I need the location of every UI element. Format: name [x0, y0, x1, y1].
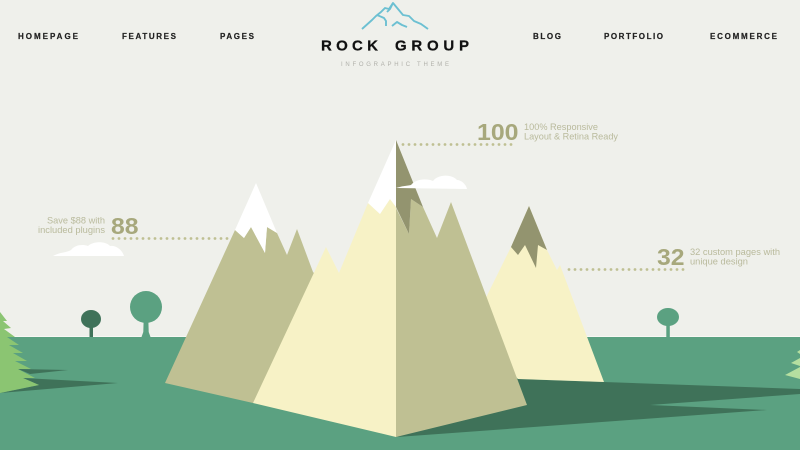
mountain: left	[165, 183, 340, 403]
navigation right: BLOG	[533, 32, 561, 41]
stat: 100: Layout & Retina Ready	[524, 131, 618, 142]
mountain: main left face	[253, 140, 396, 437]
stat: 88: 88	[111, 213, 139, 239]
logo subtitle: INFOGRAPHIC THEME	[341, 62, 449, 68]
mountain: right	[470, 206, 604, 382]
stat: 88	[38, 213, 228, 239]
cloud: left	[53, 242, 124, 256]
pine shadows: left	[0, 369, 118, 393]
cloud: centre	[396, 176, 467, 189]
navigation right: PORTFOLIO	[604, 32, 663, 41]
logo title: ROCK	[321, 38, 378, 54]
logo title	[321, 38, 469, 54]
stat: 88: included plugins	[38, 225, 105, 236]
pine tree: left	[0, 312, 39, 393]
stat: 32: unique design	[690, 256, 748, 268]
stat: 100: 100% Responsive	[524, 122, 598, 133]
navigation left: HOMEPAGE	[18, 32, 79, 41]
stat: 32: 32	[657, 244, 684, 270]
tree: large round	[130, 291, 162, 337]
stat: 32	[569, 244, 780, 270]
tree: small dark	[81, 310, 101, 337]
ground	[0, 336, 800, 450]
navigation right: ECOMMERCE	[710, 32, 778, 41]
navigation left	[18, 32, 255, 41]
navigation left: FEATURES	[122, 32, 177, 41]
stat: 100	[403, 119, 618, 145]
mountain: main right face	[396, 140, 527, 437]
stat: 88: Save $88 with	[47, 216, 105, 226]
logo: mountain icon	[362, 3, 428, 29]
navigation left: PAGES	[220, 32, 255, 41]
mountain shadow	[397, 379, 800, 437]
logo title: GROUP	[395, 38, 469, 54]
stat: 100: 100	[477, 119, 518, 145]
stat: 32: 32 custom pages with	[690, 247, 780, 258]
navigation right	[533, 32, 778, 41]
pine tree: right	[785, 350, 800, 379]
tree: right	[657, 308, 679, 337]
